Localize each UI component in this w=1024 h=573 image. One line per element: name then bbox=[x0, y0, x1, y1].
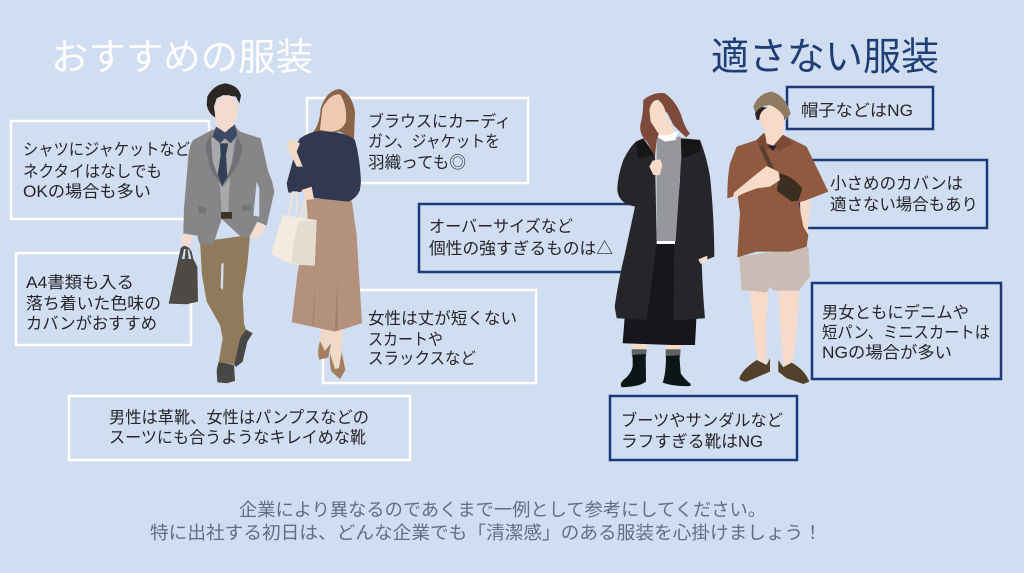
callout: blouse and cardigan: ガン、ジャケットを bbox=[368, 132, 500, 151]
callout: casual shoes bbox=[610, 396, 797, 460]
heading: unsuitable clothing: 適さない服装 bbox=[711, 36, 939, 79]
figure: man in brown shirt and beret bbox=[727, 92, 828, 384]
callout: blouse and cardigan bbox=[307, 98, 528, 183]
callout: hats bbox=[787, 87, 933, 129]
callout: bag bbox=[16, 253, 191, 345]
callout: shirt and jacket: シャツにジャケットなど bbox=[23, 140, 190, 159]
footer note bbox=[150, 500, 822, 543]
callout: casual shoes: ブーツやサンダルなど bbox=[621, 410, 783, 430]
callout: denim and short pants: 男女ともにデニムや bbox=[822, 302, 969, 322]
callout: small bags: 適さない場合もあり bbox=[830, 195, 978, 214]
callout: oversized items: 個性の強すぎるものは△ bbox=[429, 239, 613, 258]
figure: man in grey jacket bbox=[169, 83, 274, 383]
callout: skirt or slacks: スラックスなど bbox=[368, 349, 476, 368]
callout: blouse and cardigan: 羽織っても◎ bbox=[368, 153, 466, 172]
callout: denim and short pants bbox=[812, 283, 1001, 379]
callout: hats: 帽子などはNG bbox=[801, 101, 913, 120]
callout: denim and short pants: NGの場合が多い bbox=[822, 343, 952, 362]
callout: shirt and jacket: ネクタイはなしでも bbox=[23, 162, 162, 181]
callout: bag: カバンがおすすめ bbox=[26, 314, 157, 333]
callout: skirt or slacks: 女性は丈が短くない bbox=[368, 309, 517, 328]
callout: oversized items bbox=[419, 204, 644, 272]
callout: small bags bbox=[800, 160, 987, 228]
callout: shirt and jacket bbox=[11, 121, 209, 219]
callout: shoes: 男性は革靴、女性はパンプスなどの bbox=[109, 408, 369, 427]
callout: skirt or slacks: スカートや bbox=[368, 330, 443, 349]
figure: woman in long black coat bbox=[615, 93, 714, 387]
footer note: 企業により異なるのであくまで一例として参考にしてください。 bbox=[239, 500, 766, 520]
figure: woman in navy blouse and beige skirt bbox=[271, 89, 362, 379]
callout: oversized items: オーバーサイズなど bbox=[429, 217, 573, 236]
callout: shirt and jacket: OKの場合も多い bbox=[23, 182, 151, 201]
callout: bag: 落ち着いた色味の bbox=[26, 294, 161, 313]
heading: recommended clothing: おすすめの服装 bbox=[51, 36, 313, 78]
footer note: 特に出社する初日は、どんな企業でも「清潔感」のある服装を心掛けましょう！ bbox=[150, 523, 822, 543]
callout: skirt or slacks bbox=[323, 290, 536, 383]
callout: small bags: 小さめのカバンは bbox=[830, 174, 963, 193]
callout: shoes bbox=[69, 396, 410, 460]
callout: shoes: スーツにも合うようなキレイめな靴 bbox=[109, 428, 366, 447]
callout: blouse and cardigan: ブラウスにカーディ bbox=[368, 111, 511, 131]
callout: casual shoes: ラフすぎる靴はNG bbox=[621, 432, 763, 451]
callout: bag: A4書類も入る bbox=[26, 273, 134, 292]
callout: denim and short pants: 短パン、ミニスカートは bbox=[822, 323, 990, 342]
